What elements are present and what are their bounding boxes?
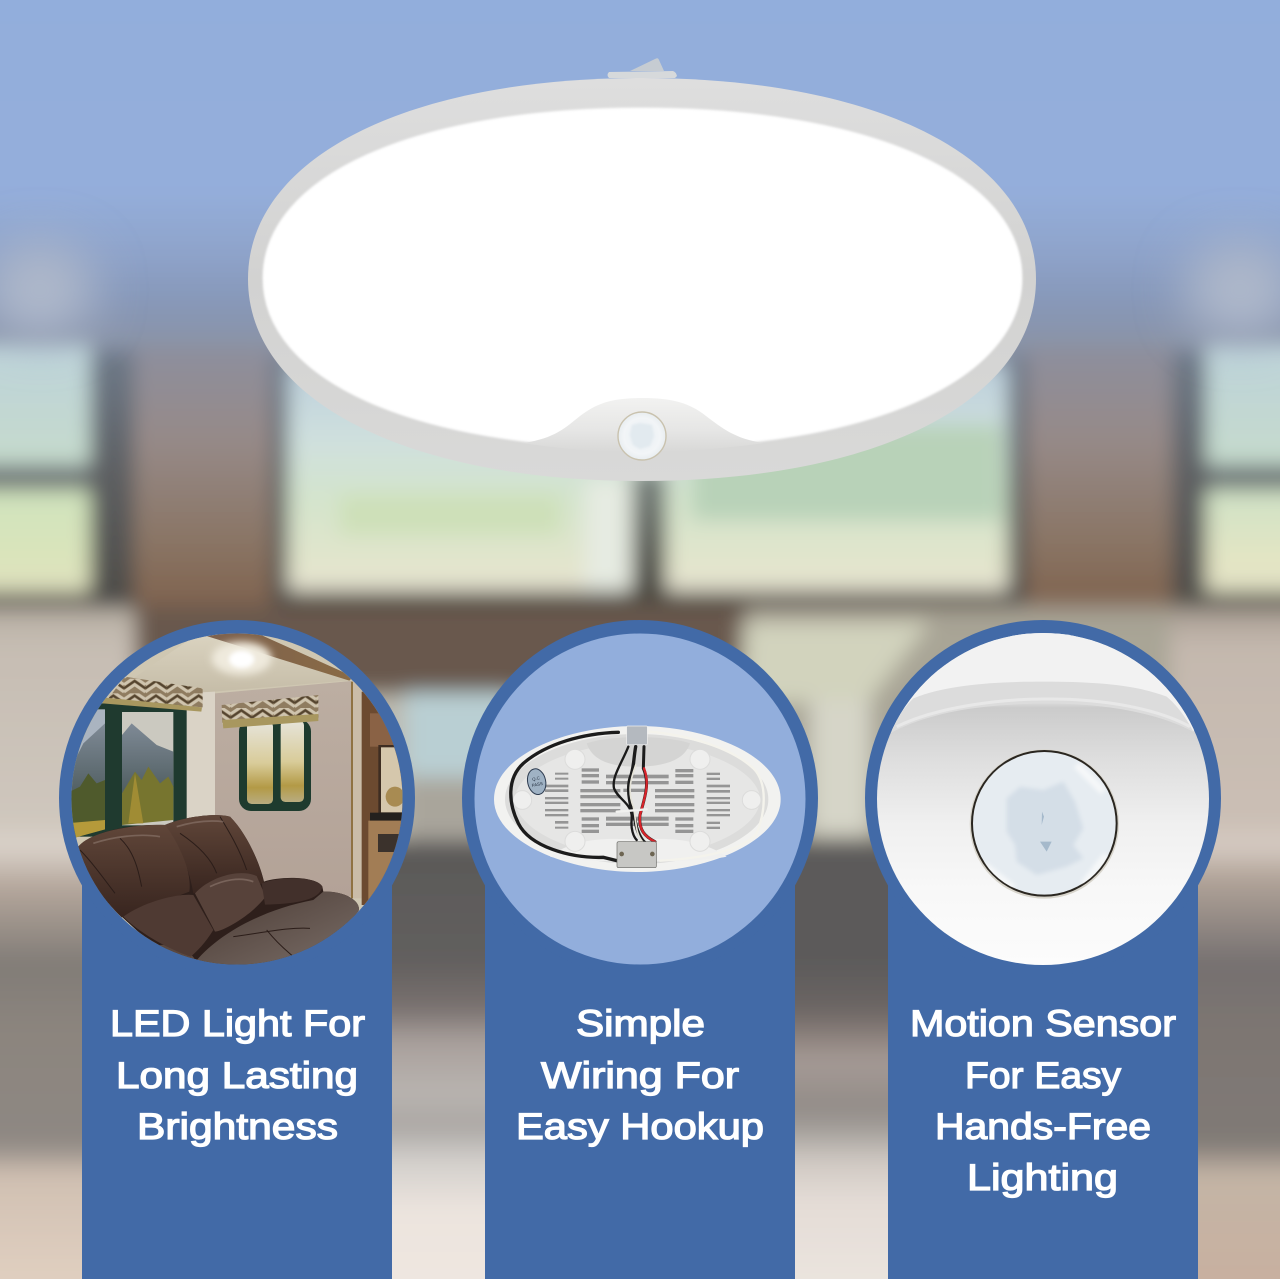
caption: LED light: Brightness [137,1106,338,1147]
feature column: motion sensor [865,620,1221,1279]
center table area [135,694,745,844]
soft pale wall patches at the far edges [0,242,1280,338]
back shell [494,726,781,872]
leather sofa [78,815,359,968]
inline switch [617,842,656,868]
ceiling [107,630,353,697]
caption: LED light [110,1003,365,1147]
motion sensor [618,412,666,460]
left frame and pillar [90,350,136,612]
trim and cabinet [353,682,362,898]
caption: simple wiring: Easy Hookup [516,1106,764,1147]
center picture window [288,365,1010,591]
circle border [462,620,818,976]
left wall [186,692,215,818]
right frame, pillar and window [1008,355,1028,610]
feature column: simple wiring [462,620,818,1279]
quality sticker: PASS [531,781,543,788]
glowing lens [263,108,1022,448]
left window [0,345,92,467]
caption: simple wiring: Wiring For [541,1055,739,1096]
lower side walls [0,608,140,1279]
right window [239,719,311,811]
caption: motion sensor: Hands-Free [935,1106,1151,1147]
caption: motion sensor: Motion Sensor [910,1003,1176,1044]
caption: motion sensor: For Easy [965,1055,1122,1096]
quality sticker: Q.C [532,775,540,782]
sofa back wood band [135,606,745,696]
caption: motion sensor [910,1003,1176,1198]
screw posts [513,749,761,851]
caption: LED light: Long Lasting [116,1055,358,1096]
wires [511,732,764,861]
left window [67,703,187,837]
left valance [108,677,203,707]
caption: simple wiring: Simple [576,1003,705,1044]
photo: RV interior with sofa [72,634,402,964]
outer rim [248,78,1036,481]
connector block [627,726,647,745]
feature column: LED light [59,620,420,1279]
vent slots [545,768,730,833]
circle border [865,620,1221,976]
column panel [485,880,795,1279]
right valance [222,695,318,725]
caption: LED light: LED Light For [110,1003,365,1044]
sensor housing bump [524,398,764,452]
rocker switch [608,58,677,78]
quality sticker [525,767,548,796]
product: oval LED dome light [248,58,1036,481]
photo: sensor close-up [870,625,1220,970]
photo: back of the light with wiring [494,726,781,872]
back wall [215,681,353,897]
caption: simple wiring [516,1003,764,1147]
column panel [82,880,392,1279]
circle inner fill [474,634,806,964]
column panel [888,880,1198,1279]
gap columns [340,840,540,1279]
caption: motion sensor: Lighting [967,1157,1118,1198]
circle border [59,620,415,976]
sensor lens [970,749,1119,899]
